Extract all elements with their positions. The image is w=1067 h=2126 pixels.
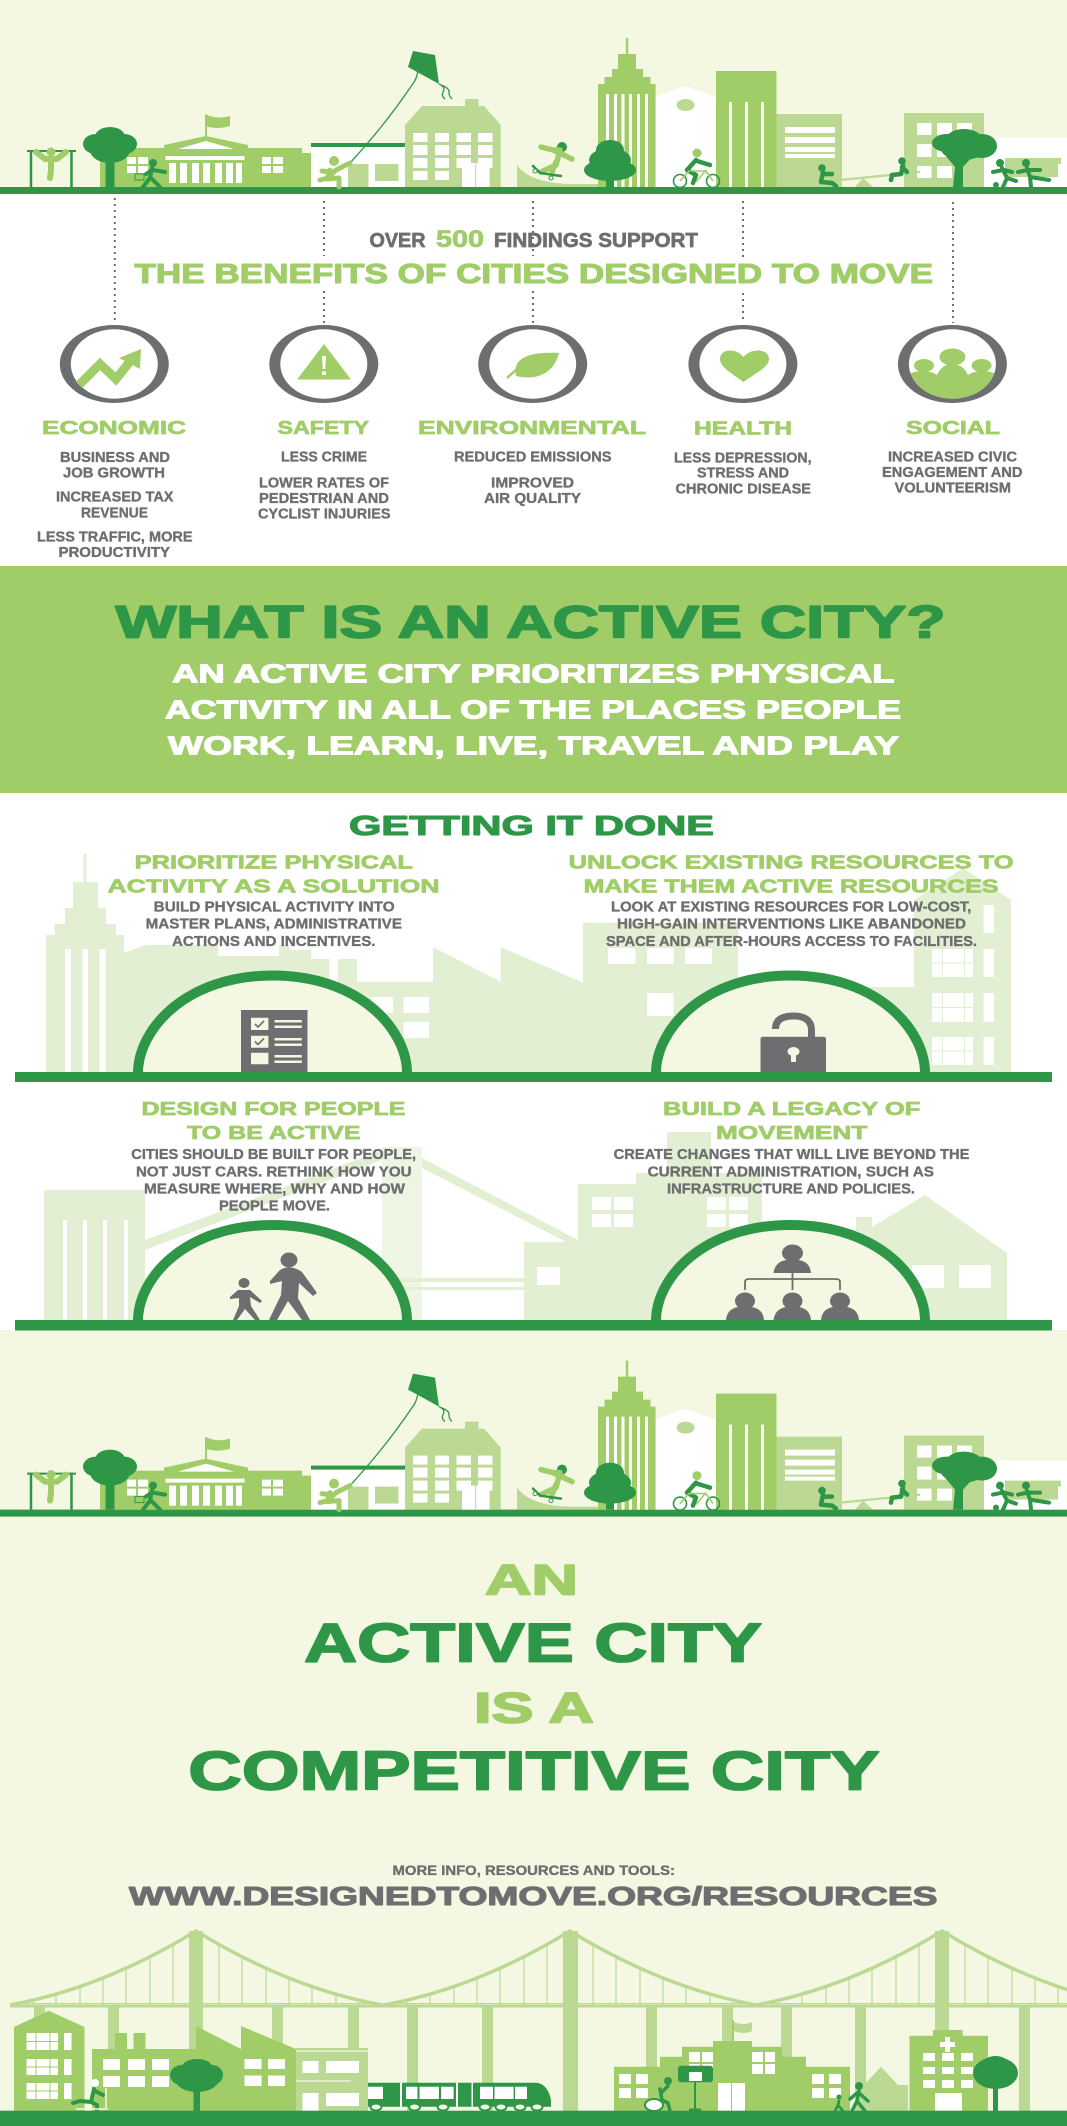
- panel: design for people: CITIES SHOULD BE BUILT FOR PEOPLE,: [131, 1147, 416, 1163]
- heading: what is an active city: WHAT IS AN ACTIVE CITY?: [116, 596, 946, 647]
- white building right: [984, 138, 1067, 187]
- dome: lower right: [656, 1225, 925, 1321]
- skate ramp and skater: [517, 142, 600, 187]
- definition text: WORK, LEARN, LIVE, TRAVEL AND PLAY: [168, 732, 899, 760]
- apartment building: [405, 99, 501, 187]
- panel: unlock existing resources: SPACE AND AFTER-HOURS ACCESS TO FACILITIES.: [606, 934, 977, 950]
- panel: environmental benefit: AIR QUALITY: [484, 491, 581, 507]
- apartment building: left: [14, 2011, 84, 2111]
- panel: design for people: DESIGN FOR PEOPLE: [142, 1098, 405, 1119]
- commuter train: [368, 2083, 551, 2110]
- tree: hospital: [973, 2056, 1018, 2111]
- panel: design for people: MEASURE WHERE, WHY AND HOW: [144, 1182, 405, 1198]
- panel: design for people: TO BE ACTIVE: [187, 1122, 360, 1143]
- panel: safety benefit: CYCLIST INJURIES: [258, 506, 391, 522]
- panel: economic benefit: BUSINESS AND: [60, 450, 170, 466]
- panel: economic benefit: PRODUCTIVITY: [58, 545, 170, 561]
- panel: environmental benefit: REDUCED EMISSIONS: [454, 449, 612, 465]
- white building with green roof: [311, 143, 405, 187]
- panel: environmental benefit: IMPROVED: [491, 475, 574, 491]
- hospital: [910, 2030, 988, 2111]
- ground bar: upper row: [15, 1072, 1052, 1082]
- call to action: resources link: WWW.DESIGNEDTOMOVE.ORG/RESOURCES: [129, 1883, 937, 1911]
- suspension bridge: [10, 1931, 1067, 2111]
- illustration: repeated city skyline: [0, 1361, 1067, 1517]
- civic building with flag: [100, 114, 311, 187]
- icon: leaf: [478, 325, 587, 403]
- school with flag: [614, 2020, 850, 2111]
- tree: left: [83, 127, 137, 187]
- panel: safety benefit: LOWER RATES OF: [259, 475, 389, 491]
- icon: checklist: [241, 1010, 308, 1072]
- illustration: city skyline with active people: [0, 38, 1067, 194]
- panel: social benefit: [882, 325, 1022, 497]
- icon: open padlock: [760, 1016, 826, 1072]
- office block with windows: [904, 113, 984, 187]
- definition text: ACTIVITY IN ALL OF THE PLACES PEOPLE: [165, 696, 901, 724]
- panel: safety benefit: PEDESTRIAN AND: [259, 491, 389, 507]
- panel: health benefit: HEALTH: [694, 418, 792, 438]
- subtitle: over 500 findings support: FINDINGS SUPPORT: [494, 230, 698, 252]
- ghost city background: upper row: [46, 854, 1011, 1072]
- cyclist: [674, 148, 720, 188]
- panel: environmental benefit: [418, 325, 646, 507]
- tall block: [716, 71, 776, 187]
- panel: economic benefit: ECONOMIC: [42, 417, 186, 438]
- panel: economic benefit: LESS TRAFFIC, MORE: [37, 529, 193, 545]
- ghost city background: lower row: [44, 1132, 1007, 1320]
- subtitle: over 500 findings support: OVER: [370, 230, 426, 252]
- icon: heart: [688, 325, 797, 403]
- panel: economic benefit: REVENUE: [81, 505, 148, 521]
- panel: health benefit: LESS DEPRESSION,: [674, 450, 812, 466]
- panel: build a legacy of movement: CREATE CHANGES THAT WILL LIVE BEYOND THE: [614, 1147, 970, 1163]
- panel: design for people: NOT JUST CARS. RETHINK HOW YOU: [136, 1164, 412, 1180]
- seesaw with children: [811, 157, 920, 187]
- pale office: [296, 2048, 368, 2111]
- subtitle: over 500 findings support: [370, 226, 698, 253]
- dotted connector lines: [115, 198, 953, 323]
- panel: safety benefit: [258, 325, 391, 522]
- icon: organization chart of people: [726, 1244, 859, 1320]
- panel: what is an active city: [0, 566, 1067, 793]
- footer ground: [0, 2111, 1067, 2126]
- panel: social benefit: VOLUNTEERISM: [894, 481, 1011, 497]
- tree: factory: [170, 2059, 223, 2111]
- closing statement: ACTIVE CITY: [304, 1613, 762, 1674]
- businessman with bag walking: [135, 159, 165, 187]
- panel: social benefit: SOCIAL: [906, 417, 1000, 438]
- panel: design for people: PEOPLE MOVE.: [219, 1199, 330, 1215]
- call to action: resources link: MORE INFO, RESOURCES AND TOOLS:: [392, 1862, 675, 1878]
- panel: social benefit: INCREASED CIVIC: [888, 449, 1018, 465]
- closing statement: AN: [485, 1556, 578, 1604]
- panel: social benefit: ENGAGEMENT AND: [882, 465, 1022, 481]
- panel: build a legacy of movement: INFRASTRUCTURE AND POLICIES.: [667, 1182, 915, 1198]
- dome: upper right: [656, 976, 925, 1073]
- panel: prioritize physical activity: MASTER PLANS, ADMINISTRATIVE: [146, 917, 402, 933]
- panel: build a legacy of movement: BUILD A LEGACY OF: [663, 1098, 920, 1119]
- low office block: [776, 114, 842, 187]
- heading: getting it done: GETTING IT DONE: [349, 810, 714, 841]
- tree: right: [932, 129, 997, 187]
- basketball hoop and wheelchair player: [645, 2066, 713, 2111]
- panel: prioritize physical activity: PRIORITIZE PHYSICAL: [135, 851, 413, 872]
- icon: growth arrow: [60, 325, 169, 403]
- closing statement: COMPETITIVE CITY: [188, 1740, 880, 1801]
- heading: the benefits of cities designed to move: THE BENEFITS OF CITIES DESIGNED TO MOVE: [134, 258, 933, 289]
- tree: center: [584, 140, 636, 187]
- panel: economic benefit: [37, 325, 193, 561]
- skyscraper: [598, 38, 656, 187]
- definition text: AN ACTIVE CITY PRIORITIZES PHYSICAL: [172, 660, 895, 688]
- definition text: [165, 660, 901, 760]
- factory: [92, 2026, 296, 2111]
- illustration: bridge and city footer: [0, 1931, 1067, 2126]
- closing statement: IS A: [474, 1685, 594, 1733]
- panel: health benefit: [674, 325, 812, 497]
- kite and string: [350, 51, 452, 163]
- panel: build a legacy of movement: [614, 1098, 970, 1321]
- icon: group of people: [898, 325, 1007, 403]
- panel: prioritize physical activity: ACTIVITY AS A SOLUTION: [108, 875, 440, 896]
- panel: unlock existing resources: [569, 851, 1014, 1073]
- runner flying kite: [320, 156, 350, 187]
- panel: safety benefit: SAFETY: [278, 417, 370, 438]
- panel: health benefit: CHRONIC DISEASE: [676, 481, 811, 497]
- panel: unlock existing resources: HIGH-GAIN INTERVENTIONS LIKE ABANDONED: [617, 917, 966, 933]
- panel: environmental benefit: ENVIRONMENTAL: [418, 417, 646, 438]
- panel: economic benefit: JOB GROWTH: [63, 466, 165, 482]
- small house: [864, 2067, 908, 2111]
- panel: build a legacy of movement: MOVEMENT: [716, 1122, 868, 1143]
- panel: prioritize physical activity: BUILD PHYSICAL ACTIVITY INTO: [154, 899, 395, 915]
- white house with oval window: [656, 86, 716, 187]
- panel: prioritize physical activity: ACTIONS AND INCENTIVES.: [172, 934, 376, 950]
- panel: economic benefit: INCREASED TAX: [56, 490, 174, 506]
- dome: upper left: [138, 976, 407, 1073]
- icon: warning triangle: [269, 325, 378, 403]
- scooter rider: [73, 2079, 108, 2110]
- pull-up bar with person: [27, 148, 76, 187]
- panel: health benefit: STRESS AND: [697, 466, 789, 482]
- adult and child walking: [835, 2082, 868, 2111]
- subtitle: over 500 findings support: 500: [436, 226, 484, 253]
- call to action: resources link: [129, 1862, 937, 1911]
- panel: unlock existing resources: UNLOCK EXISTING RESOURCES TO: [569, 851, 1014, 872]
- dome: lower left: [138, 1225, 407, 1321]
- closing statement: [188, 1556, 880, 1801]
- ground bar: lower row: [15, 1320, 1052, 1330]
- panel: prioritize physical activity: [108, 851, 440, 1073]
- two runners with ball: [993, 159, 1049, 188]
- icon: adult and child walking: [230, 1252, 317, 1320]
- panel: unlock existing resources: MAKE THEM ACTIVE RESOURCES: [584, 875, 999, 896]
- panel: build a legacy of movement: CURRENT ADMINISTRATION, SUCH AS: [648, 1164, 934, 1180]
- panel: unlock existing resources: LOOK AT EXISTING RESOURCES FOR LOW-COST,: [611, 899, 971, 915]
- panel: design for people: [131, 1098, 416, 1321]
- panel: safety benefit: LESS CRIME: [281, 449, 367, 465]
